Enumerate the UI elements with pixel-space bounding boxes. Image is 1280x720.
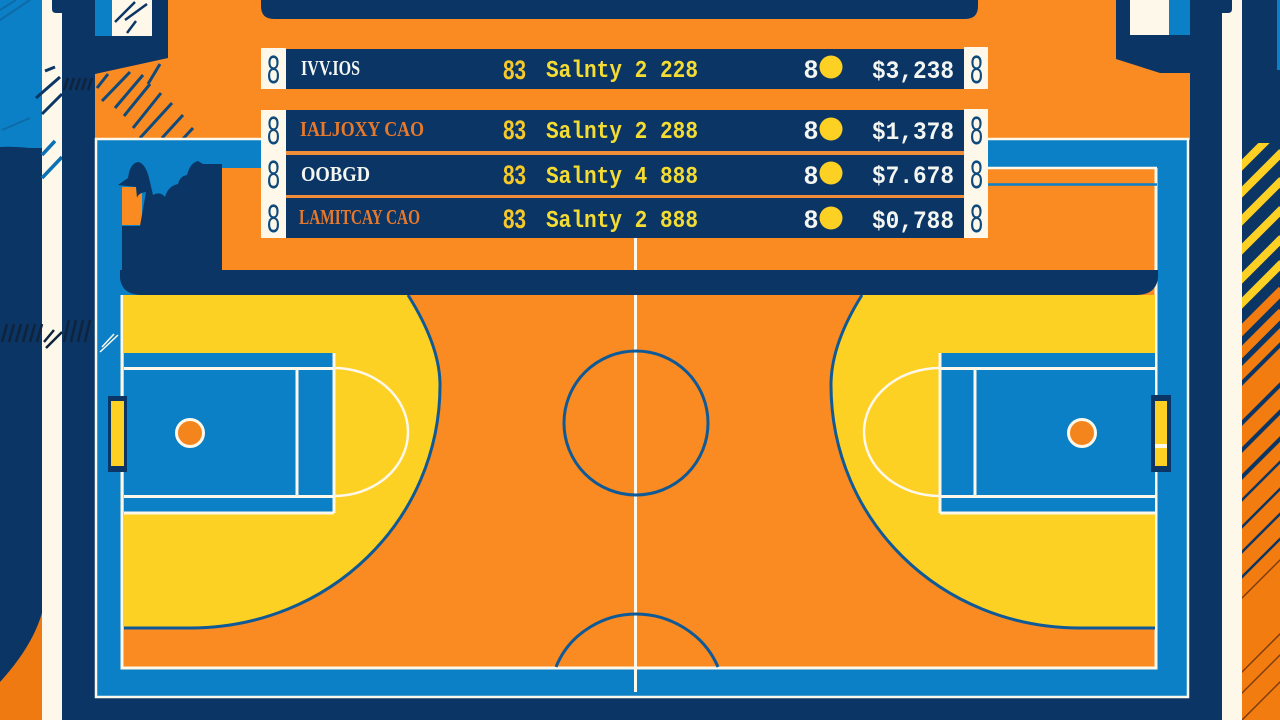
court inner floor: [222, 168, 1156, 295]
row: team four: [261, 196, 988, 241]
orange upper field: [95, 0, 1190, 140]
navy scorer bar with silhouette figure: [118, 161, 1158, 295]
right decorative strip: [1242, 0, 1280, 720]
left three point zone: [124, 295, 440, 628]
row: team two: $1,378: [872, 118, 954, 147]
row: team one: [261, 47, 988, 92]
row: team four: LAMITCAY CAO: [299, 205, 420, 229]
row: team three: 8: [970, 153, 983, 197]
header bar: [261, 0, 978, 19]
left top corner block: [62, 0, 168, 74]
inner boundary line: [122, 168, 1156, 668]
row: team four: 8: [267, 197, 280, 241]
row: team four: $0,788: [872, 207, 954, 236]
row: team three: 8: [804, 162, 818, 190]
orange backing behind rows: [286, 150, 964, 200]
right accent line: [988, 183, 1157, 186]
row: team two: 8: [267, 109, 280, 153]
row: team two: 8: [970, 109, 983, 153]
row: team one: 8: [970, 48, 983, 92]
row: team four: Salnty 2 888: [546, 208, 698, 235]
left strip hatch marks: [36, 67, 62, 178]
row: team one: 8: [267, 48, 280, 92]
row: team two: 83: [503, 115, 526, 145]
row: team two: 8: [804, 117, 818, 145]
row: team four: 83: [503, 204, 526, 234]
row: team two: Salnty 2 288: [546, 119, 698, 146]
court outer boundary: [96, 139, 1188, 697]
row: team four: 8: [970, 197, 983, 241]
row: team two: IALJOXY CAO: [300, 117, 424, 141]
left decorative strip: [0, 0, 42, 720]
row: team three: $7.678: [872, 162, 954, 191]
right backboard: [1151, 395, 1171, 472]
left cream stripe: [42, 0, 62, 720]
baseline arc: [556, 614, 718, 667]
right three point arc: [831, 295, 1155, 628]
row: team three: 83: [503, 160, 526, 190]
row: team one: $3,238: [872, 57, 954, 86]
row: team one: 83: [503, 55, 526, 85]
inner top line: [988, 167, 1157, 169]
row: team three: OOBGD: [301, 162, 370, 186]
right key: [864, 353, 1155, 513]
row: team three: Salnty 4 888: [546, 164, 698, 191]
left three point arc: [124, 295, 440, 628]
row: team one: 8: [804, 56, 818, 84]
small blue floor marks: [100, 334, 118, 352]
center circle: [564, 351, 708, 495]
left key: [124, 353, 408, 513]
hatch marks upper left: [97, 64, 193, 142]
row: team two: [261, 109, 988, 153]
right cream stripe: [1222, 0, 1242, 720]
lower inner floor: [122, 295, 1156, 668]
row: team one: Salnty 2 228: [546, 58, 698, 85]
right top corner block: [1116, 0, 1222, 73]
row: team three: 8: [267, 153, 280, 197]
basketball court: [96, 139, 1188, 697]
row: team four: 8: [804, 206, 818, 234]
center line: [634, 238, 637, 692]
row: team three: [261, 153, 988, 197]
dark stipple marks on frame: [2, 78, 92, 348]
right three point zone: [831, 295, 1155, 628]
row: team one: IVV.IOS: [301, 56, 360, 80]
frame top tabs: [52, 0, 1232, 13]
left backboard: [108, 396, 127, 472]
